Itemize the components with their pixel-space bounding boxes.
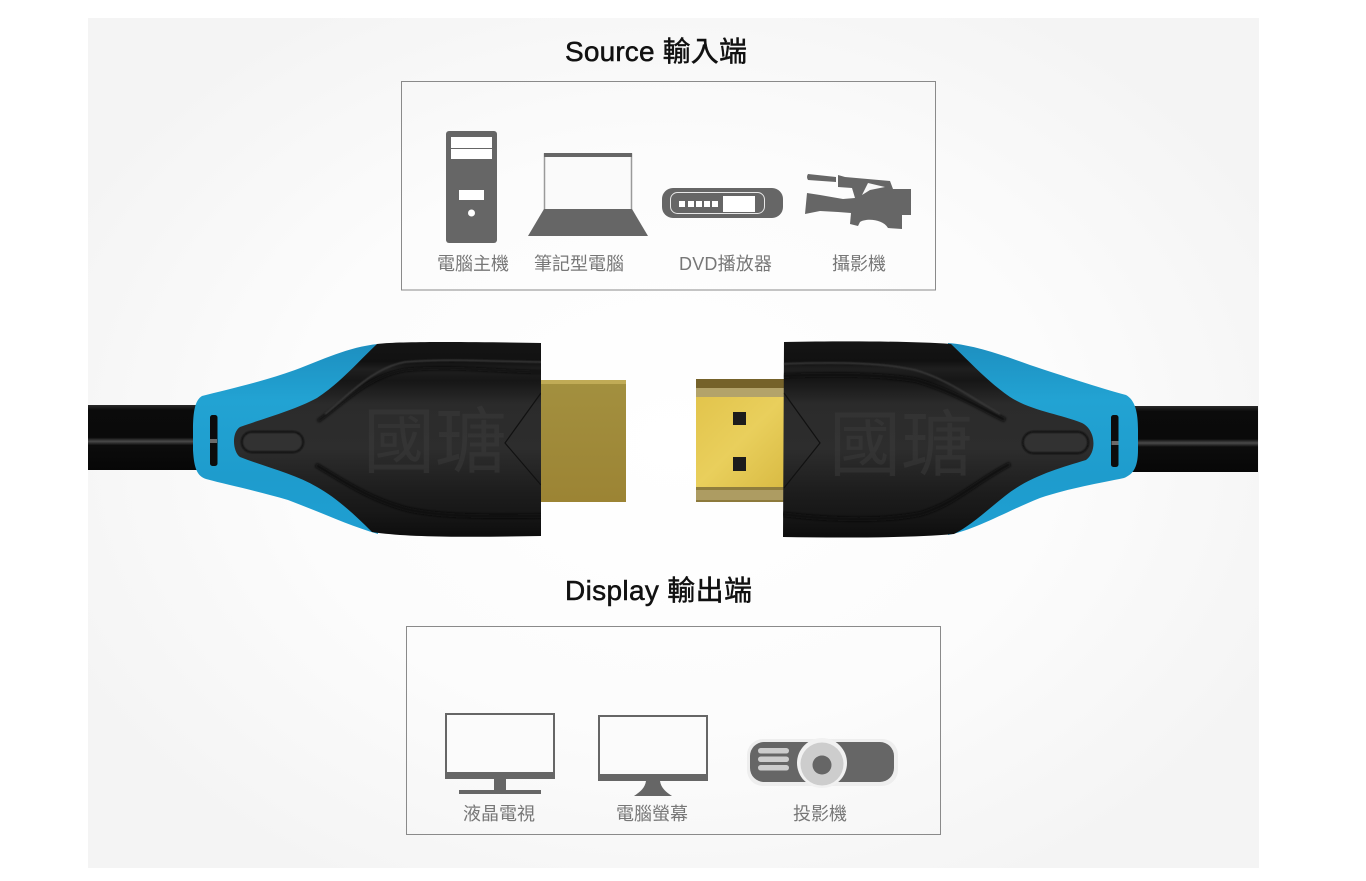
icon: laptop [528, 153, 648, 236]
vent slot: right [1111, 415, 1118, 467]
watermark: right: 國瑭 [829, 406, 973, 486]
labels: display devices: 投影機 [793, 804, 847, 824]
icon: projector [747, 738, 898, 788]
vent slot: left [210, 415, 218, 466]
labels: source devices: 攝影機 [832, 254, 886, 274]
body grooves: right [780, 363, 1010, 519]
labels: source devices: 電腦主機 [437, 254, 509, 274]
panel: source devices [402, 82, 936, 290]
left connector [88, 342, 626, 537]
black body: left [234, 342, 541, 537]
labels: display devices: 液晶電視 [463, 804, 535, 824]
blue boot: left [193, 344, 378, 534]
gold plug: left [540, 380, 626, 502]
labels: source devices [437, 254, 886, 274]
blue boot: right [948, 343, 1138, 535]
icon: lcd tv [445, 714, 555, 794]
watermark: left: 國瑭 [363, 403, 507, 483]
labels: display devices: 電腦螢幕 [616, 804, 688, 824]
black body: right [783, 341, 1093, 538]
icon: desktop tower [446, 131, 497, 243]
icon: computer monitor [598, 716, 708, 796]
cable: right [1132, 406, 1258, 472]
labels: source devices: 筆記型電腦 [534, 254, 624, 274]
title: source: Source 輸入端 [565, 36, 747, 67]
right connector [696, 341, 1258, 538]
button oval: left [242, 432, 303, 452]
labels: source devices: DVD播放器 [679, 254, 772, 274]
button oval: right [1023, 432, 1088, 453]
panel: display devices [406, 626, 940, 834]
body grooves: left [316, 360, 545, 516]
gold plug: right [696, 379, 784, 502]
icon: dvd player [662, 188, 783, 218]
labels: display devices [463, 804, 847, 824]
icon: video camera [805, 174, 911, 229]
cable: left [88, 405, 198, 470]
title: display: Display 輸出端 [565, 575, 752, 606]
